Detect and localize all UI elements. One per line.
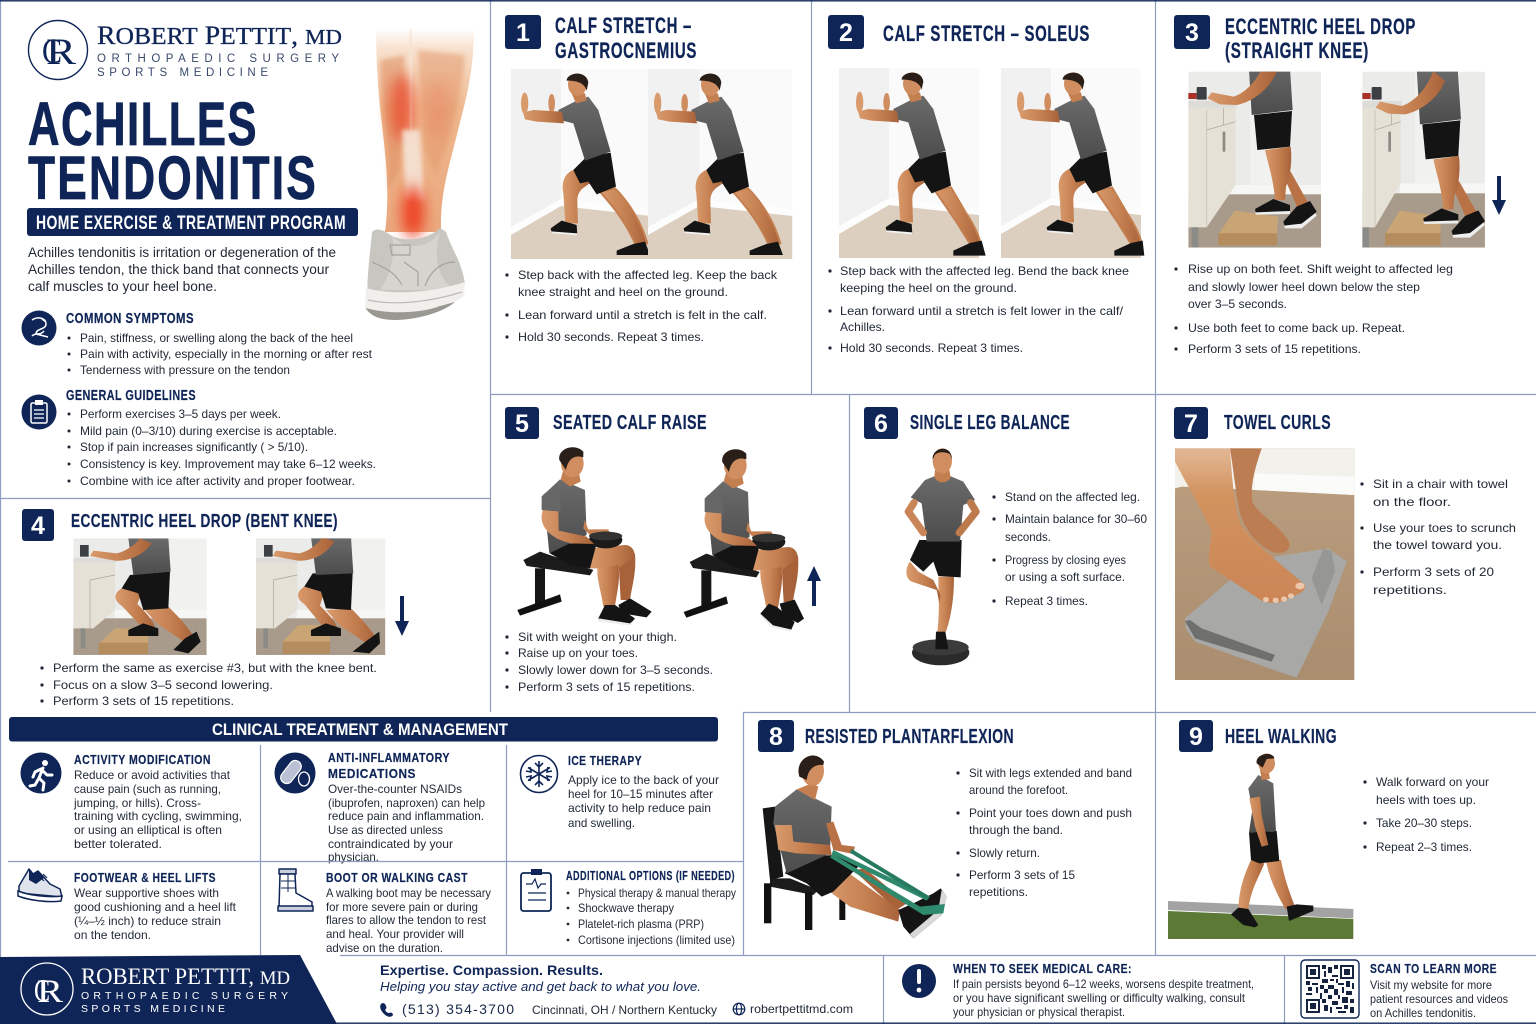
icon: shoe <box>18 869 62 902</box>
number badge 5 <box>505 407 539 439</box>
instructions: Step back with the affected leg. Bend the back knee <box>840 264 1129 278</box>
section: general guidelines: Combine with ice after activity and proper footwear. <box>80 474 355 488</box>
subtitle banner: HOME EXERCISE & TREATMENT PROGRAM <box>36 213 346 234</box>
panel: exercise 6 <box>850 395 1155 712</box>
photo: calf stretch start <box>511 69 651 259</box>
section: common symptoms: Pain, stiffness, or swelling along the back of the heel <box>80 331 353 345</box>
card: anti-inflammatory medications: Over-the-counter NSAIDs <box>328 782 462 796</box>
card: activity modification: ACTIVITY MODIFICATION <box>74 752 211 767</box>
instructions: Perform 3 sets of 15 repetitions. <box>1188 342 1361 356</box>
instructions: Slowly return. <box>969 846 1040 860</box>
panel: overview <box>0 0 490 498</box>
instructions <box>1174 262 1453 356</box>
card: boot or walking cast: flares to allow the tendon to rest <box>326 913 487 927</box>
number badge 7: 7 <box>1184 410 1198 438</box>
photo: raised position <box>1188 58 1321 248</box>
card: anti-inflammatory medications: MEDICATIONS <box>328 766 416 781</box>
card: activity modification: cause pain (such as running, <box>74 782 221 796</box>
icon: pills <box>274 752 316 794</box>
icon: alert <box>902 964 936 998</box>
tagline and contact: Helping you stay active and get back to what you love. <box>380 979 701 994</box>
subtitle banner <box>27 208 358 236</box>
section: general guidelines: GENERAL GUIDELINES <box>66 388 196 404</box>
section: common symptoms: Tenderness with pressure on the tendon <box>80 363 290 377</box>
card: anti-inflammatory medications: (ibuprofen, naproxen) can help <box>328 796 485 810</box>
card: footwear and heel lifts <box>18 869 237 942</box>
panel: exercise 8 <box>744 713 1155 955</box>
icon: phone <box>380 1003 393 1017</box>
card: footwear and heel lifts: FOOTWEAR & HEEL LIFTS <box>74 870 216 885</box>
card: anti-inflammatory medications <box>274 750 485 864</box>
panel: exercise 7 <box>1156 395 1536 712</box>
card: boot or walking cast: A walking boot may be necessary <box>326 886 491 900</box>
panel: exercise 9 <box>1156 713 1536 955</box>
section: general guidelines: Consistency is key. Improvement may take 6–12 weeks. <box>80 457 376 471</box>
instructions: Perform 3 sets of 15 <box>969 868 1075 882</box>
tagline and contact: (513) 354-3700 <box>402 1001 514 1017</box>
instructions: around the forefoot. <box>969 783 1068 797</box>
instructions: Maintain balance for 30–60 <box>1005 512 1147 526</box>
section: common symptoms <box>66 311 373 377</box>
arrow: up <box>807 566 821 606</box>
arrow: down <box>1492 176 1506 215</box>
card: additional options: Shockwave therapy <box>578 901 674 915</box>
card: activity modification: jumping, or hills). Cross- <box>73 796 201 810</box>
icon: runner <box>20 752 62 794</box>
footer <box>0 955 1508 1024</box>
panel: exercise 2 <box>812 0 1155 394</box>
card: footwear and heel lifts: good cushioning and a heel lift <box>74 900 237 914</box>
number badge 2 <box>828 15 864 49</box>
callout: scan QR <box>1301 960 1508 1020</box>
instructions: Achilles. <box>840 320 885 334</box>
heading <box>1225 14 1416 63</box>
footer logo block: ROBERT PETTIT, MD <box>81 964 290 989</box>
instructions: Hold 30 seconds. Repeat 3 times. <box>518 330 704 344</box>
number badge 2: 2 <box>839 19 853 47</box>
icon: guidelines clipboard <box>22 394 56 430</box>
card: ice therapy <box>520 753 719 830</box>
instructions: through the band. <box>969 823 1063 837</box>
card: ice therapy: heel for 10–15 minutes after <box>568 787 713 801</box>
figure: single leg on balance disc <box>906 448 976 665</box>
instructions <box>828 264 1129 355</box>
instructions: Lean forward until a stretch is felt lower in the calf/ <box>840 304 1124 318</box>
instructions: Slowly lower down for 3–5 seconds. <box>518 663 713 677</box>
intro text: Achilles tendon, the thick band that connects your <box>28 262 330 277</box>
photo: calf stretch lean <box>648 69 792 259</box>
heading: ECCENTRIC HEEL DROP (BENT KNEE) <box>71 510 338 531</box>
card: activity modification: better tolerated. <box>74 837 162 851</box>
icon: symptoms <box>22 310 56 346</box>
number badge 8: 8 <box>769 723 783 751</box>
card: boot or walking cast <box>278 869 491 955</box>
icon: clipboard <box>521 869 551 911</box>
figure: seated flat feet <box>517 447 652 625</box>
card: boot or walking cast: for more severe pain or during <box>326 900 478 914</box>
instructions: Point your toes down and push <box>969 806 1132 820</box>
callout: scan QR: on Achilles tendonitis. <box>1370 1006 1476 1020</box>
instructions: heels with toes up. <box>1376 793 1476 807</box>
callout: scan QR: SCAN TO LEARN MORE <box>1370 962 1497 976</box>
heading: SINGLE LEG BALANCE <box>910 411 1070 434</box>
figure: walking on heels <box>1168 753 1353 939</box>
footer logo block <box>0 955 337 1024</box>
tagline and contact: Expertise. Compassion. Results. <box>380 962 603 978</box>
number badge 4 <box>22 509 54 541</box>
instructions: and slowly lower heel down below the step <box>1188 280 1420 294</box>
panel: exercise 3 <box>1174 15 1506 356</box>
instructions: Sit with weight on your thigh. <box>518 630 677 644</box>
card: activity modification: Reduce or avoid activities that <box>74 768 231 782</box>
callout: when to seek medical care: WHEN TO SEEK MEDICAL CARE: <box>953 962 1132 976</box>
footer logo block: C <box>34 972 50 1008</box>
callout: when to seek medical care <box>902 962 1254 1019</box>
intro text <box>28 245 336 294</box>
heading: HEEL WALKING <box>1225 725 1337 748</box>
instructions: seconds. <box>1005 530 1051 544</box>
section: common symptoms: Pain with activity, especially in the morning or after rest <box>80 347 373 361</box>
intro text: Achilles tendonitis is irritation or degeneration of the <box>28 245 336 260</box>
heading: SEATED CALF RAISE <box>553 411 707 434</box>
photo: foot scrunching towel <box>1175 448 1354 680</box>
instructions: repetitions. <box>1373 583 1447 597</box>
instructions: Rise up on both feet. Shift weight to affected leg <box>1188 262 1453 276</box>
heading: GASTROCNEMIUS <box>555 38 697 63</box>
instructions: Repeat 3 times. <box>1005 594 1088 608</box>
figure: seated with resistance band <box>763 755 947 938</box>
title <box>28 90 318 212</box>
banner heading <box>9 717 718 742</box>
card: boot or walking cast: advise on the duration. <box>326 941 443 955</box>
card: additional options: Platelet-rich plasma (PRP) <box>578 917 704 931</box>
logo: Robert Pettit MD: C <box>42 31 62 71</box>
logo: Robert Pettit MD: ROBERT PETTIT, MD <box>97 21 342 50</box>
instructions: Step back with the affected leg. Keep the back <box>518 268 778 282</box>
instructions: Perform 3 sets of 15 repetitions. <box>53 694 234 708</box>
footer logo block: ORTHOPAEDIC SURGERY <box>81 990 288 1002</box>
instructions: Progress by closing eyes <box>1005 553 1126 567</box>
number badge 6: 6 <box>874 410 888 438</box>
logo: Robert Pettit MD: SPORTS MEDICINE <box>97 67 268 79</box>
callout: scan QR: Visit my website for more <box>1370 978 1492 992</box>
number badge 8 <box>758 720 794 752</box>
panel: clinical treatment and management <box>0 713 743 956</box>
photo: raised position <box>73 538 207 655</box>
number badge 1: 1 <box>516 19 530 47</box>
heading: CALF STRETCH – SOLEUS <box>883 21 1090 46</box>
card: additional options: Physical therapy & manual therapy <box>578 886 736 900</box>
photo: lowered position <box>256 537 385 655</box>
card: boot or walking cast: and heal. Your provider will <box>326 927 464 941</box>
number badge 3 <box>1174 15 1210 49</box>
tagline and contact <box>380 962 853 1017</box>
card: additional options <box>521 869 736 947</box>
instructions: knee straight and heel on the ground. <box>518 285 728 299</box>
heading: TOWEL CURLS <box>1224 411 1331 434</box>
instructions: Perform 3 sets of 20 <box>1373 565 1494 579</box>
instructions: Repeat 2–3 times. <box>1376 840 1472 854</box>
title: TENDONITIS <box>28 144 318 212</box>
photos: bent knee heel drop <box>73 537 385 655</box>
card: boot or walking cast: BOOT OR WALKING CAST <box>326 870 468 885</box>
instructions <box>505 268 778 344</box>
instructions: on the floor. <box>1373 495 1451 509</box>
section: general guidelines <box>66 388 376 488</box>
callout: scan QR: patient resources and videos <box>1370 992 1508 1006</box>
instructions: Stand on the affected leg. <box>1005 490 1140 504</box>
photos: heel drop on step <box>1188 58 1485 248</box>
instructions: Sit with legs extended and band <box>969 766 1132 780</box>
tagline and contact: robertpettitmd.com <box>750 1002 853 1016</box>
callout: when to seek medical care: or you have significant swelling or difficulty walking, consult <box>953 991 1246 1005</box>
instructions <box>505 630 713 694</box>
instructions <box>1360 477 1516 597</box>
banner heading: CLINICAL TREATMENT & MANAGEMENT <box>212 721 508 739</box>
card: anti-inflammatory medications: physician. <box>328 850 379 864</box>
intro text: calf muscles to your heel bone. <box>28 279 217 294</box>
instructions: Walk forward on your <box>1376 775 1489 789</box>
title: ACHILLES <box>28 90 258 158</box>
instructions: Use both feet to come back up. Repeat. <box>1188 321 1405 335</box>
callout: when to seek medical care: If pain persists beyond 6–12 weeks, worsens despite treatment, <box>953 977 1254 991</box>
number badge 6 <box>864 407 898 439</box>
card: additional options: ADDITIONAL OPTIONS (IF NEEDED) <box>566 869 735 883</box>
card: anti-inflammatory medications: Use as directed unless <box>328 823 443 837</box>
heading: RESISTED PLANTARFLEXION <box>805 725 1014 748</box>
number badge 4: 4 <box>31 512 45 540</box>
number badge 3: 3 <box>1185 19 1199 47</box>
instructions <box>40 661 377 708</box>
section: general guidelines: Mild pain (0–3/10) during exercise is acceptable. <box>80 424 337 438</box>
instructions: or using a soft surface. <box>1005 570 1125 584</box>
section: common symptoms: COMMON SYMPTOMS <box>66 311 194 327</box>
logo: Robert Pettit MD <box>28 20 342 80</box>
figure: seated heels raised <box>684 449 804 632</box>
instructions <box>1363 775 1489 854</box>
heading: (STRAIGHT KNEE) <box>1225 38 1369 63</box>
logo: Robert Pettit MD: ORTHOPAEDIC SURGERY <box>97 53 339 65</box>
illustration: leg and Achilles tendon <box>365 28 474 320</box>
icon: globe <box>733 1003 745 1015</box>
card: ice therapy: and swelling. <box>568 816 635 830</box>
section: general guidelines: Stop if pain increases significantly ( > 5/10). <box>80 440 308 454</box>
instructions <box>956 766 1132 899</box>
instructions: Focus on a slow 3–5 second lowering. <box>53 678 273 692</box>
card: footwear and heel lifts: on the tendon. <box>74 928 151 942</box>
instructions: Take 20–30 steps. <box>1376 816 1472 830</box>
card: footwear and heel lifts: Wear supportive shoes with <box>74 886 219 900</box>
icon: snowflake <box>520 756 558 792</box>
instructions: Use your toes to scrunch <box>1373 521 1516 535</box>
panel: exercise 5 <box>491 395 849 712</box>
instructions: the towel toward you. <box>1373 538 1502 552</box>
panel: exercise 1 <box>491 0 811 394</box>
footer logo block: SPORTS MEDICINE <box>81 1003 225 1015</box>
footer logo block: R <box>37 974 63 1010</box>
instructions: repetitions. <box>969 885 1028 899</box>
instructions: Perform the same as exercise #3, but with the knee bent. <box>53 661 377 675</box>
card: ice therapy: Apply ice to the back of your <box>568 773 719 787</box>
tagline and contact: Cincinnati, OH / Northern Kentucky <box>532 1003 717 1017</box>
card: ice therapy: activity to help reduce pain <box>568 801 711 815</box>
instructions <box>992 490 1147 608</box>
icon: boot <box>278 869 313 911</box>
instructions: Raise up on your toes. <box>518 646 638 660</box>
number badge 5: 5 <box>515 410 529 438</box>
instructions: over 3–5 seconds. <box>1188 297 1287 311</box>
instructions: keeping the heel on the ground. <box>840 281 1017 295</box>
number badge 7 <box>1174 407 1208 439</box>
number badge 9 <box>1179 720 1213 752</box>
heading: ECCENTRIC HEEL DROP <box>1225 14 1416 39</box>
number badge 1 <box>505 15 541 49</box>
instructions: Perform 3 sets of 15 repetitions. <box>518 680 695 694</box>
photo: lowered position <box>1362 68 1485 248</box>
logo: Robert Pettit MD: R <box>46 32 76 73</box>
card: additional options: Cortisone injections (limited use) <box>578 933 735 947</box>
card: anti-inflammatory medications: contraindicated by your <box>328 837 453 851</box>
card: anti-inflammatory medications: ANTI-INFLAMMATORY <box>328 750 450 765</box>
heading <box>555 13 697 63</box>
card: activity modification: or using an elliptical is often <box>74 823 222 837</box>
card: ice therapy: ICE THERAPY <box>568 753 642 768</box>
section: general guidelines: Perform exercises 3–5 days per week. <box>80 407 281 421</box>
callout: when to seek medical care: your physician or physical therapist. <box>953 1005 1125 1019</box>
number badge 9: 9 <box>1189 723 1203 751</box>
card: activity modification: training with cycling, swimming, <box>74 809 242 823</box>
photo: soleus stretch lean <box>1001 68 1144 258</box>
arrow: down <box>395 596 409 636</box>
instructions: Sit in a chair with towel <box>1373 477 1508 491</box>
card: activity modification <box>20 752 242 851</box>
instructions: Lean forward until a stretch is felt in the calf. <box>518 308 767 322</box>
card: anti-inflammatory medications: reduce pain and inflammation. <box>328 809 484 823</box>
heading: CALF STRETCH – <box>555 13 692 38</box>
card: footwear and heel lifts: (¼–½ inch) to reduce strain <box>74 914 221 928</box>
panel: exercise 4 <box>22 509 409 708</box>
instructions: Hold 30 seconds. Repeat 3 times. <box>840 341 1023 355</box>
QR code <box>1301 960 1359 1018</box>
photo: soleus stretch start <box>839 68 986 258</box>
